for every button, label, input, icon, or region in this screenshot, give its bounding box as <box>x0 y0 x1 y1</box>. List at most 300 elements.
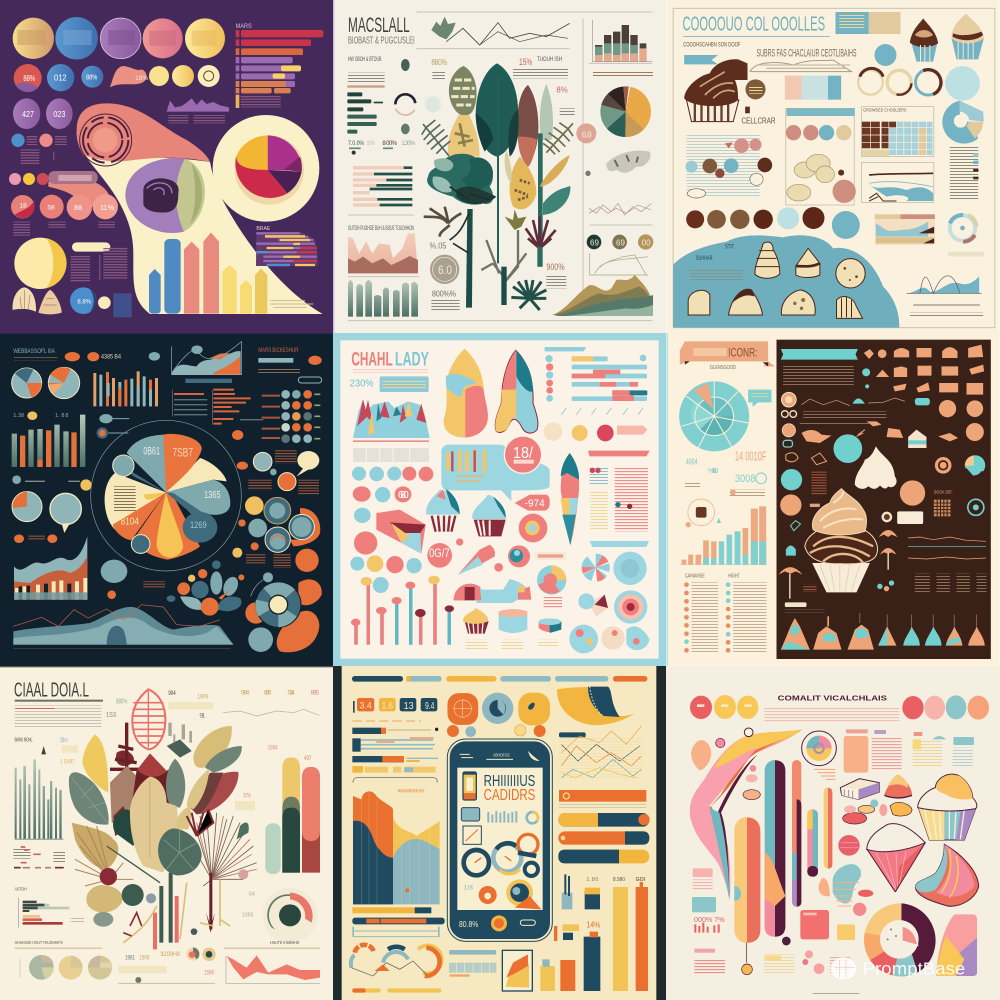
left big numbers: %60 <box>708 466 718 475</box>
central speech bubble <box>441 436 550 501</box>
ribbon heading <box>680 341 775 371</box>
percent stats row <box>348 141 416 155</box>
title <box>350 349 429 392</box>
pie chart in cream circle <box>213 115 319 222</box>
yellow foliage <box>540 155 570 187</box>
top right dots <box>544 422 647 441</box>
small candy cluster <box>843 799 912 824</box>
teal callout <box>748 390 772 407</box>
tall bars left: 1.88 <box>55 413 68 419</box>
tall teal leaf <box>476 63 518 157</box>
number tiles: 1.6 <box>382 700 393 710</box>
blue cloud with pastries <box>673 235 899 328</box>
bottom right bars: GOI <box>636 877 645 883</box>
left stats: S1% <box>59 737 68 744</box>
teal oval <box>101 560 127 583</box>
vertical pill chart top <box>93 371 158 406</box>
bottom stat medallion <box>430 241 566 310</box>
right legend list <box>950 146 978 199</box>
phone button bar <box>491 915 507 931</box>
peach circle <box>900 480 925 506</box>
target donut <box>537 565 566 608</box>
central trees illustration <box>422 63 573 310</box>
yellow leaf <box>82 734 108 793</box>
line strip and rows <box>800 398 905 426</box>
cone <box>867 824 925 892</box>
left small shapes <box>691 728 760 800</box>
panel: pastel candy infographic <box>666 666 1000 1000</box>
tan round leaf <box>86 885 122 913</box>
mountain chart <box>552 275 653 316</box>
orange ring and burst <box>479 886 497 904</box>
header rules and line chart <box>348 12 652 321</box>
round icon <box>686 499 721 527</box>
large pale yellow circle <box>14 238 67 289</box>
middle diagram panel <box>786 108 856 205</box>
title: CIAAL DOIA.L <box>14 680 89 702</box>
top labels: 984 <box>241 689 250 696</box>
number tiles: 13 <box>404 701 414 712</box>
bottom right area chart <box>906 252 984 316</box>
green bar chart <box>348 280 418 317</box>
top labels: 904 <box>168 690 176 697</box>
two lists: CARAWISE <box>685 573 705 579</box>
title: 230% <box>350 378 374 389</box>
sketch line chart <box>589 203 651 215</box>
bottom ball on stalk <box>742 937 791 975</box>
dark teal oval <box>113 809 137 846</box>
bottom row cakes <box>781 602 985 650</box>
orange banner <box>559 790 646 808</box>
lower pastries <box>688 290 710 315</box>
world map <box>585 151 651 176</box>
dot row with label bar <box>9 171 112 207</box>
phone top bar icons: ABHOFOS <box>493 753 510 758</box>
horizontal orange bars <box>172 390 263 425</box>
mound <box>884 774 912 798</box>
right pie chart <box>613 99 638 124</box>
tan scalloped leaf <box>130 777 178 873</box>
title: BIOBAST & PUGCUSLEI <box>348 35 415 46</box>
bottom labels: 1981 <box>125 954 135 961</box>
phone title: RHIIIIIIUS <box>484 773 535 790</box>
tall right bars <box>235 744 320 874</box>
top labels: 91 <box>199 713 206 720</box>
title: COOOOUO COL OOOLLES <box>682 13 825 36</box>
round sage lily <box>158 828 202 875</box>
bottom right bars <box>540 874 648 991</box>
top left circles <box>690 695 758 719</box>
line chart box <box>862 162 934 202</box>
left big numbers <box>685 449 766 497</box>
central petal pie: 7SB7 <box>172 445 193 459</box>
sub heading sketch <box>750 48 856 72</box>
round cookie <box>836 259 865 288</box>
title <box>764 693 899 721</box>
percent stats row: 1.30% <box>401 141 416 147</box>
top right header <box>258 348 322 383</box>
left big numbers: 14 0010F <box>735 449 766 464</box>
calendar table: GROWSES CHOSLIERS <box>863 107 906 112</box>
central speech bubble: 18/ <box>513 445 534 462</box>
central petal pie: 8104 <box>121 517 139 528</box>
central petal pie <box>105 434 230 560</box>
left fern <box>422 120 450 156</box>
phone: CADIDRS <box>484 787 535 804</box>
sage leaf <box>540 84 553 140</box>
top rocket shapes <box>444 349 538 437</box>
phone <box>447 739 552 941</box>
cone slice <box>456 538 503 575</box>
blue striped shape <box>819 864 873 916</box>
red stat circle: 0G/7 <box>429 546 450 560</box>
coral swoosh top with spiral <box>77 103 210 166</box>
title: COMALIT VICALCHLAIS <box>778 693 887 702</box>
phone: 80.8% <box>459 919 479 929</box>
mini icon tiles <box>461 808 480 821</box>
pink stat circle: 6.9 <box>582 129 592 139</box>
bottom cupcake and cakes <box>463 608 561 650</box>
yellow background leaf <box>448 103 480 157</box>
bottom center boxes <box>449 950 532 991</box>
right grass burst <box>188 813 257 886</box>
mountain spiky chart <box>353 399 430 442</box>
bar arrows chart <box>149 232 313 314</box>
large area chart left <box>353 788 440 904</box>
left stats: 1 SA97 <box>60 759 75 766</box>
percent stats row: 1% <box>366 141 375 147</box>
blue cloud with pastries: SUHHAR <box>696 256 713 262</box>
left ring column <box>782 392 826 465</box>
small callouts <box>12 414 248 491</box>
stat labels: 880% <box>431 58 447 67</box>
number tiles: 3.4 <box>360 700 372 710</box>
panel: retro phone infographic <box>333 666 666 1000</box>
left teal pies <box>12 492 81 543</box>
white drip <box>855 446 897 489</box>
three round stats <box>587 234 653 275</box>
sage center leaf <box>166 759 185 808</box>
top labels: 800 <box>264 689 272 696</box>
panel: purple pastel infographic <box>0 0 333 333</box>
left notes: 000% 7% <box>694 915 725 924</box>
percentage circles row: 012 <box>54 73 67 82</box>
mini bar chart <box>488 811 516 823</box>
top labels <box>106 689 319 720</box>
tall right bars: 578 <box>243 793 251 800</box>
tall right bars: 1904 <box>268 744 278 751</box>
side icons and circles <box>780 469 826 556</box>
teal wheel pie <box>679 381 749 451</box>
white cake slice <box>908 430 926 448</box>
main cream swoosh <box>77 103 323 314</box>
left mini bar rows <box>352 721 438 783</box>
calendar table <box>862 107 934 157</box>
bottom layered wave chart <box>13 590 233 648</box>
yellow swoosh <box>557 687 635 725</box>
right dropping rocket <box>561 453 579 545</box>
top right circles <box>902 695 989 720</box>
diamond maroon <box>132 753 172 806</box>
right swirl donuts <box>935 455 985 476</box>
three round stats: 00 <box>642 238 651 247</box>
right legend grid <box>588 451 650 531</box>
teal spiky plant <box>511 280 546 310</box>
left notes <box>692 868 725 974</box>
bottom labels: 1909 <box>139 954 150 961</box>
swirl lollipop <box>802 731 836 779</box>
central petal pie: 0B61 <box>143 446 160 458</box>
central petal pie: 1269 <box>190 520 207 530</box>
pastry icon grid <box>802 345 984 443</box>
gauge: 1055 <box>242 913 254 919</box>
panel: cupcake infographic <box>666 0 1000 333</box>
title: COOOHSCAHBN SON DOOF <box>683 43 741 49</box>
info cards top <box>844 729 974 773</box>
bottom right ball trio <box>569 625 650 653</box>
teal circle and donut <box>942 66 984 144</box>
tan right leaf <box>187 769 209 809</box>
purple area sparkline <box>167 98 229 123</box>
footer pies: HHUHSHE HOUT THUOHHIFS <box>15 940 63 945</box>
swoosh <box>690 729 803 900</box>
brown badges <box>742 79 776 125</box>
purple percentage circles: 427 <box>22 109 34 119</box>
big swirl cupcake <box>805 489 878 592</box>
header pills <box>352 676 647 682</box>
coral percent circles: 18 <box>19 202 27 209</box>
top labels: 1909 <box>197 694 208 701</box>
center leaves illustration <box>69 689 257 949</box>
top labels: 1S3 <box>106 710 116 719</box>
stat labels: 8% <box>556 85 568 95</box>
purple circle with roll icon <box>125 158 205 233</box>
brown circle row <box>686 207 860 239</box>
circle badges left: 680 <box>398 490 409 501</box>
bottom stat medallion: 900% <box>546 262 565 272</box>
blue ball and bottom note <box>70 287 132 317</box>
panel: botanical tree infographic <box>333 0 666 333</box>
large area chart left: BUSINESS BY <box>398 788 425 793</box>
bottom right bars: 14% <box>586 921 600 930</box>
legend dots with notes <box>11 134 67 164</box>
teal center circle <box>834 430 865 463</box>
cake slice <box>796 248 820 278</box>
lollipop bars <box>351 576 454 645</box>
bottom stat medallion: %.05 <box>430 241 447 250</box>
top right horizontal bar chart <box>236 24 323 108</box>
big cupcake <box>918 774 977 840</box>
left big numbers: 3008 <box>735 473 755 485</box>
umbrella icons <box>778 530 898 599</box>
bottom labels: HHUTE IHUBHHE <box>270 940 299 945</box>
top right stacked bar chart <box>592 20 653 76</box>
coral percent circles: 88 <box>74 203 82 212</box>
sketch icon cluster <box>686 133 772 198</box>
pinwheel <box>589 561 603 575</box>
maroon and red dark leaf <box>190 772 238 814</box>
top cupcakes <box>910 13 984 62</box>
panel: candy pastel infographic <box>333 333 666 666</box>
bottom labels: $199H8 <box>161 951 180 958</box>
title: CHAHL <box>351 349 393 370</box>
three round stats: 69 <box>616 238 625 247</box>
coral percent circles: 58 <box>47 204 55 211</box>
large donut <box>864 903 936 976</box>
gauge <box>242 888 318 943</box>
pale circle and eye target <box>578 552 647 624</box>
top round tiles <box>447 693 550 737</box>
center ring icons <box>508 514 566 567</box>
bottom left rings <box>351 945 442 993</box>
tall bars left <box>12 411 85 467</box>
pink circle candy <box>838 835 860 856</box>
footer pies <box>15 940 112 980</box>
tan top right leaf <box>193 726 232 768</box>
title <box>682 13 830 49</box>
cluster of rings <box>232 496 320 572</box>
shell icons <box>13 287 62 314</box>
left stats: BMHG IBOHL. <box>15 737 33 743</box>
left column gauges <box>391 59 420 134</box>
mini phone icon <box>462 771 477 801</box>
coral area chart <box>226 955 320 983</box>
text block <box>353 448 429 462</box>
linked rings <box>464 834 538 876</box>
percentage circles row: 88% <box>86 72 98 81</box>
top labels: S34 <box>287 689 295 696</box>
heading: WEBBASSOFL IIIA <box>13 348 55 355</box>
pastry stack <box>755 242 780 278</box>
percentage circles row <box>14 64 220 92</box>
stat labels: 15% <box>519 57 532 67</box>
red stat circle <box>427 543 452 568</box>
teal tree crown <box>427 154 493 205</box>
sage top right leaf <box>205 746 242 773</box>
grey plant <box>168 723 192 748</box>
small icon table <box>262 390 320 443</box>
ribbon heading: ICONR: <box>728 345 758 359</box>
panel: dark teal and orange infographic <box>0 333 333 666</box>
horizontal bar chart <box>15 887 84 928</box>
bottom labels: 1596 <box>204 969 214 976</box>
coral percent circles: 11% <box>100 203 115 212</box>
brown badges: CELLCRAR <box>742 116 776 125</box>
title <box>348 13 415 46</box>
bottom stat medallion: 800%% <box>432 289 456 299</box>
pill bars right <box>558 813 650 863</box>
tall right bars: 497 <box>304 755 312 762</box>
right ringed circles <box>248 450 319 495</box>
coral percent circles <box>11 194 118 236</box>
maroon palm <box>526 217 556 248</box>
right fern <box>543 123 573 154</box>
top circle row <box>13 17 225 60</box>
cookie bar <box>840 779 879 799</box>
gauge: S4 <box>248 891 255 897</box>
grid waffle block: BOOK BEF <box>934 490 953 495</box>
tall bars left: 1.38 <box>13 413 24 419</box>
main ring <box>91 420 241 571</box>
horizontal bar chart: ASTOH <box>15 887 27 892</box>
top area chart <box>172 341 242 383</box>
big chocolate cupcake <box>684 59 748 122</box>
percent stats row: 7.0.0% <box>348 141 365 147</box>
sage large left leaf <box>69 772 109 825</box>
small striped bar chart: BRAE <box>256 226 271 232</box>
heading: 4385 B4 <box>101 353 121 360</box>
watermark: PromptBase <box>831 957 965 979</box>
footer line <box>813 993 859 995</box>
stems <box>161 873 171 943</box>
thin vertical bar chart <box>15 759 63 840</box>
pink area chart: GUTOH PUOHDE BUH & BOUE TOUOHHON <box>348 226 414 232</box>
teal dot icons <box>852 368 930 405</box>
stat labels <box>425 57 575 116</box>
number tiles <box>353 698 437 713</box>
top labels: 895 <box>311 689 319 696</box>
cupcakes <box>426 489 506 536</box>
percentage circles row: 18% <box>135 75 148 82</box>
purple percentage circles <box>13 98 73 129</box>
two top pies <box>12 367 80 399</box>
ring gauges <box>858 44 941 95</box>
ribbon label <box>684 55 718 64</box>
blue ball and bottom note: 8.8% <box>77 299 92 305</box>
right wave lines <box>908 537 986 594</box>
purple percentage circles: 023 <box>53 109 65 119</box>
pink tag stat <box>515 495 550 511</box>
panel: chocolate icons infographic <box>666 333 1000 666</box>
heading <box>13 348 160 361</box>
bottom labels <box>118 940 320 983</box>
number tiles: 9.4 <box>425 701 435 712</box>
panel: botanical leaves infographic <box>0 666 333 1000</box>
pill and text blocks <box>71 242 127 282</box>
circle badges left <box>350 467 433 593</box>
small striped bar chart <box>256 226 318 266</box>
left big numbers: 4004 <box>686 458 698 467</box>
lower cards <box>764 910 855 974</box>
stat labels: TUOUH ISH <box>537 57 562 63</box>
ribbon lower right <box>590 541 649 547</box>
percent stats row: 8 00% <box>382 141 398 147</box>
lower center tag shape <box>454 579 531 603</box>
chocolate panel <box>776 340 991 659</box>
stacked horizontal bars <box>353 168 412 205</box>
small gantt <box>13 847 65 868</box>
percentage circles row: 88% <box>23 74 35 83</box>
tan grass base behind leaves <box>72 823 118 869</box>
patterned olive leaf <box>449 66 477 115</box>
phone: 1/8 <box>464 884 473 891</box>
bottom right bars: 1.80 <box>586 877 598 883</box>
bottom right wheel <box>245 572 322 652</box>
title <box>14 680 103 727</box>
title info boxes <box>836 12 900 34</box>
bottom right card <box>936 914 977 976</box>
two lists <box>684 573 766 654</box>
area band chart <box>875 214 935 245</box>
central petal pie: 1365 <box>204 490 221 501</box>
pink tag stat: -974 <box>525 498 545 509</box>
brown leaf <box>517 85 538 167</box>
pink 3D block <box>376 510 426 554</box>
blue cloud with pastries: STIT <box>725 244 734 250</box>
top labels: 880% <box>116 696 128 705</box>
tree trunk <box>467 210 472 307</box>
maroon plant <box>116 750 134 766</box>
